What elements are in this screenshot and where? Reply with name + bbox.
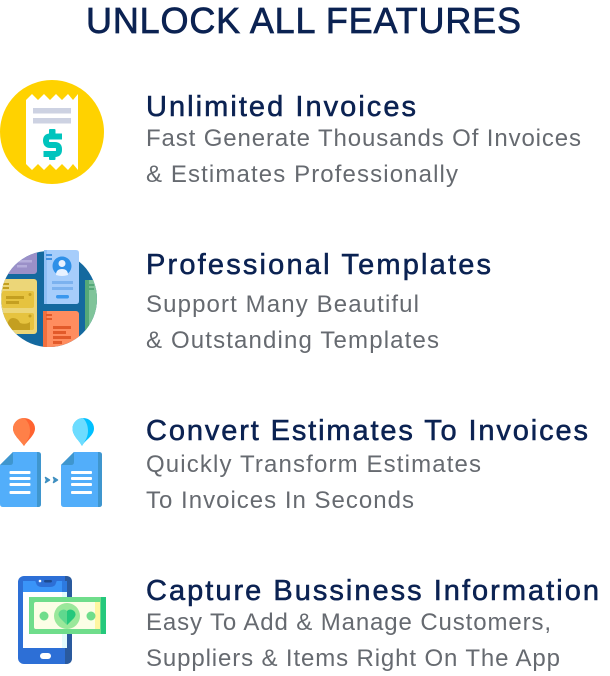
feature row: professional templates (0, 249, 491, 354)
heading: unlimited invoices: Unlimited Invoices (146, 91, 416, 123)
title: UNLOCK ALL FEATURES (86, 0, 521, 41)
icon: left document (0, 452, 41, 507)
description: capture business information (146, 609, 560, 672)
description: convert estimates: Quickly Transform Estimates (146, 451, 481, 478)
description: convert estimates: To Invoices In Seconds (146, 487, 414, 514)
icon: orange pin (13, 418, 35, 446)
heading: capture business information: Capture Bussiness Information (146, 575, 599, 607)
description: unlimited invoices: & Estimates Professionally (146, 161, 458, 188)
feature row: convert estimates (0, 415, 588, 514)
icon: documents conversion (0, 418, 102, 507)
heading: professional templates: Professional Templates (146, 249, 491, 281)
description: professional templates: Support Many Beautiful (146, 291, 419, 318)
description: capture business information: Easy To Add & Manage Customers, (146, 609, 551, 636)
description: convert estimates (146, 451, 481, 514)
description: capture business information: Suppliers & Items Right On The App (146, 645, 560, 672)
icon: blue pin (72, 418, 94, 446)
icon: receipt with dollar sign (0, 80, 104, 184)
icon: right document (61, 452, 102, 507)
feature row: unlimited invoices (0, 80, 581, 188)
heading: convert estimates: Convert Estimates To Invoices (146, 415, 588, 447)
icon: phone with banknote (18, 576, 106, 664)
icon: template cards (0, 250, 99, 351)
description: professional templates: & Outstanding Templates (146, 327, 439, 354)
description: unlimited invoices (146, 125, 581, 188)
arrows (46, 478, 58, 482)
description: professional templates (146, 291, 439, 354)
description: unlimited invoices: Fast Generate Thousands Of Invoices (146, 125, 581, 152)
feature row: capture business information (18, 575, 599, 672)
